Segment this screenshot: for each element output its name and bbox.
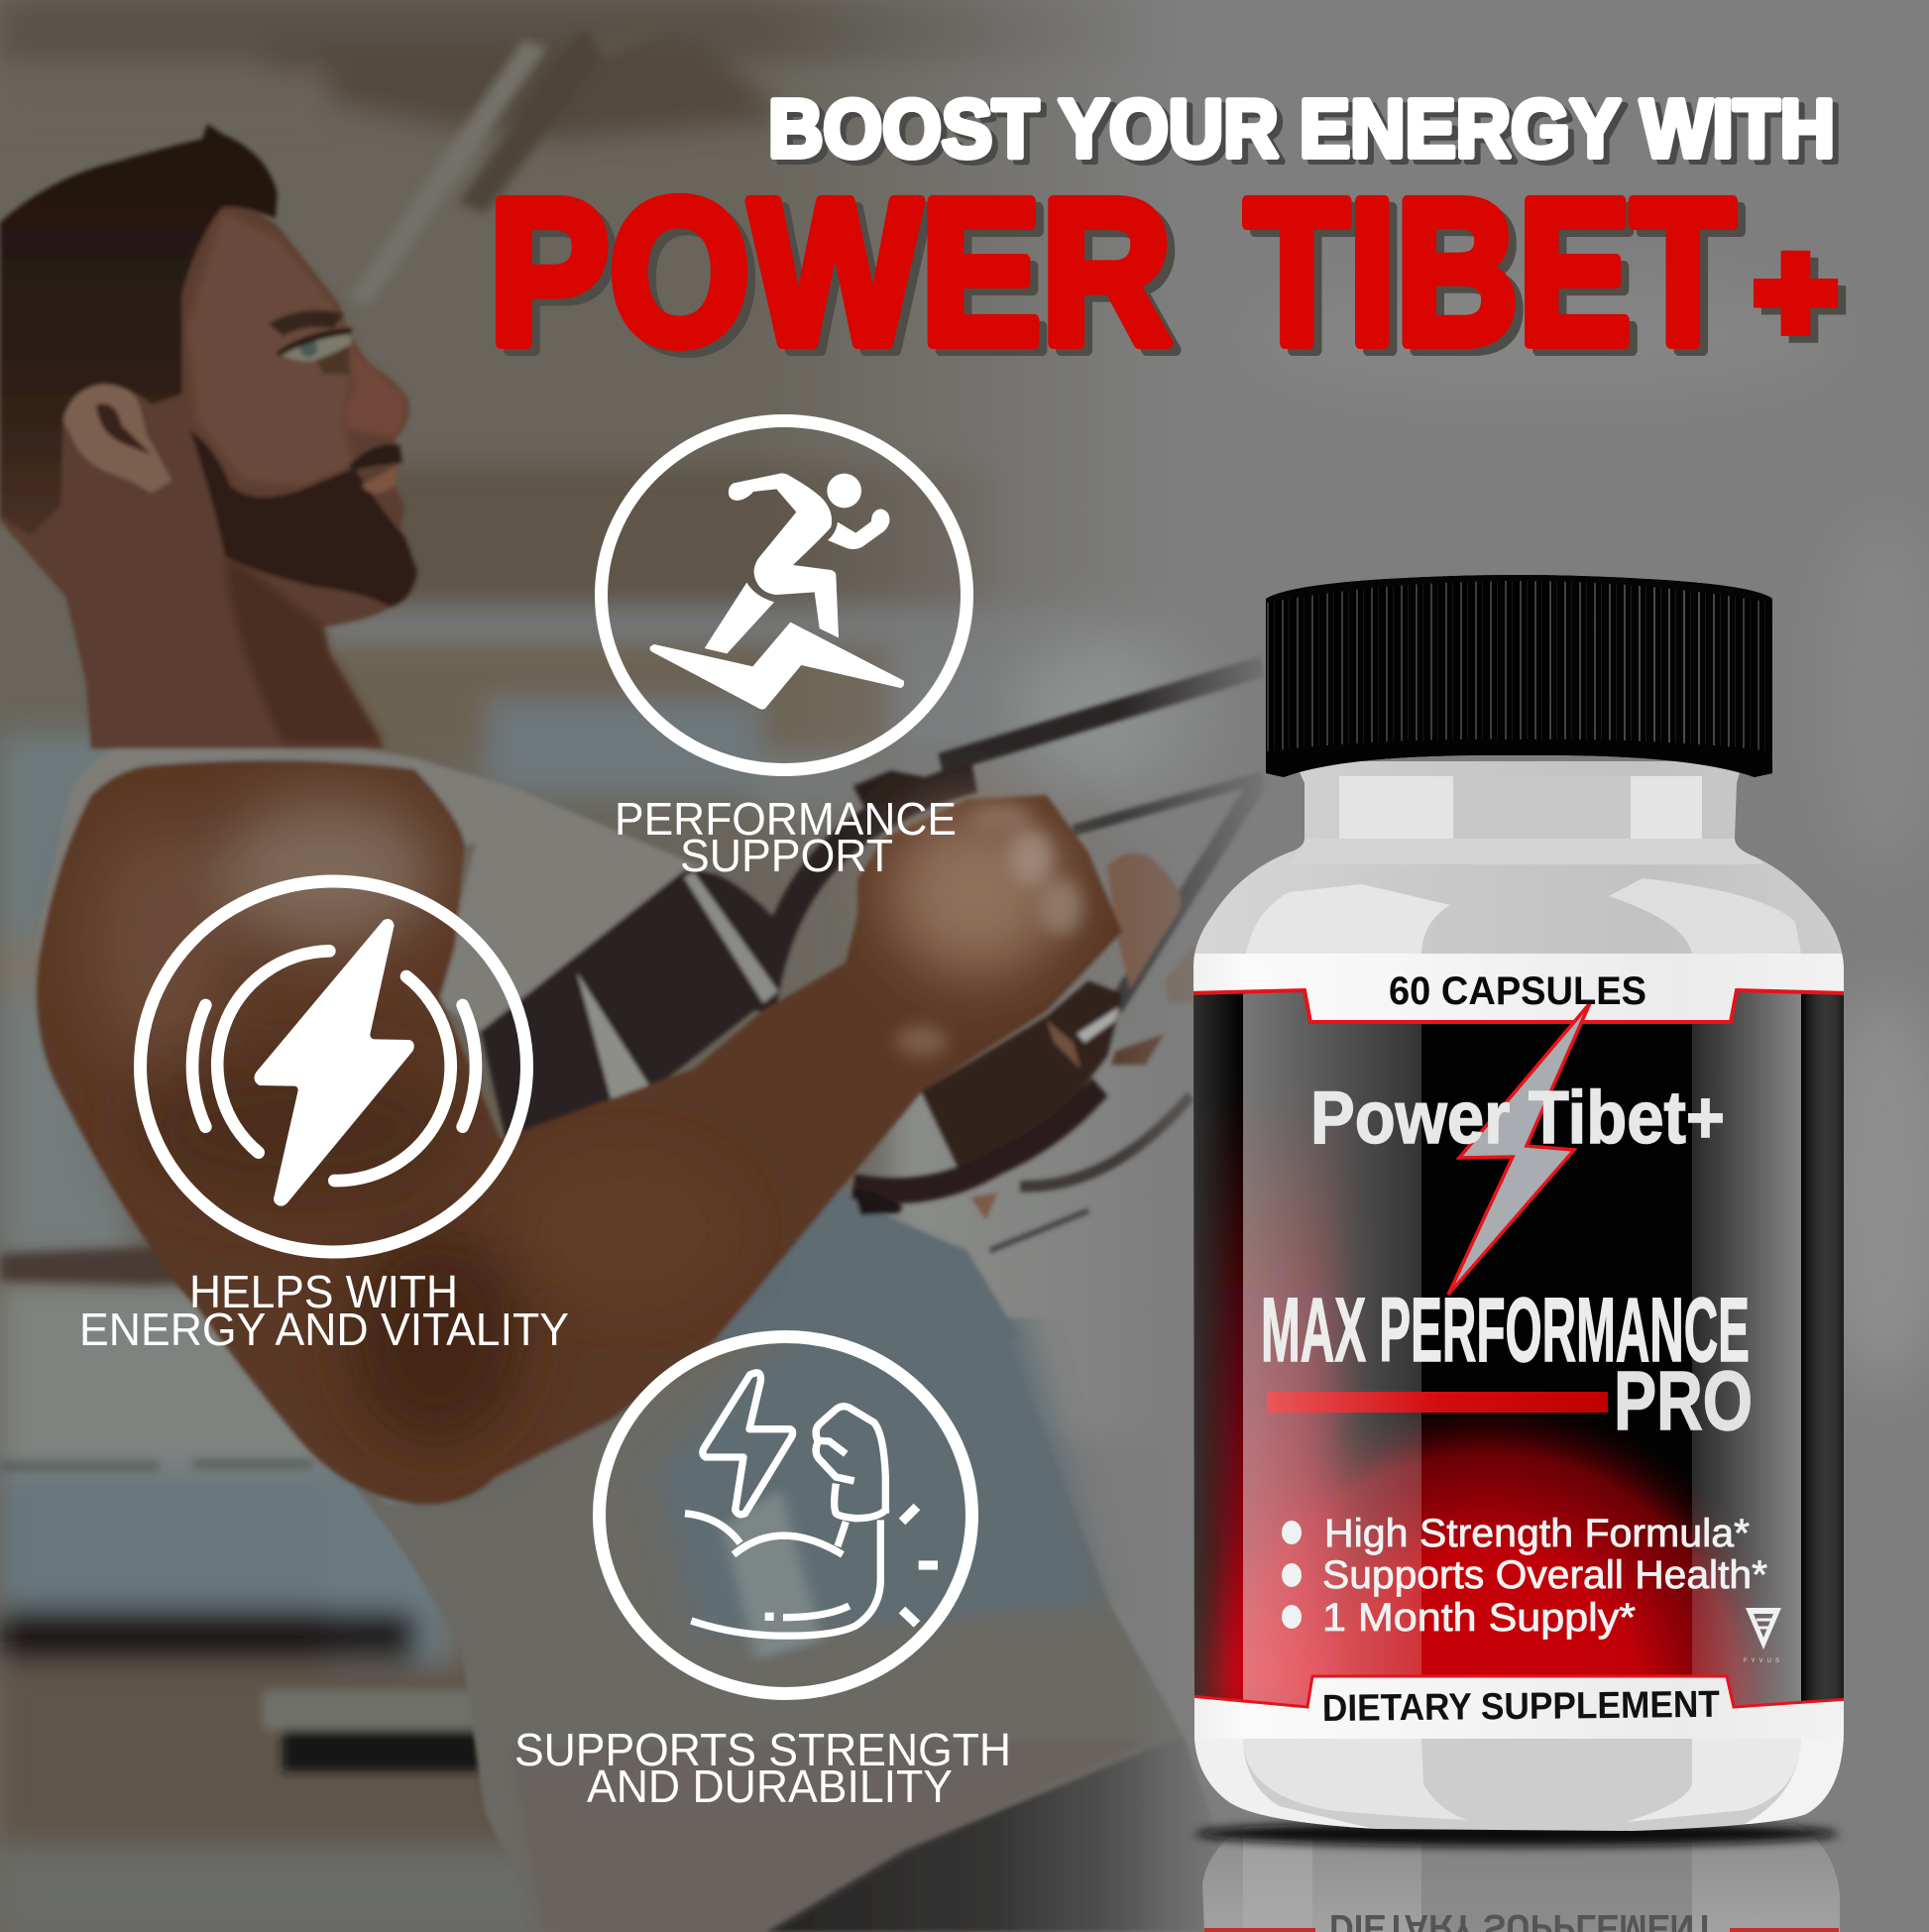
arm shading — [89, 798, 1066, 1447]
label: dietary supplement: DIETARY SUPPLEMENT — [1322, 1684, 1720, 1730]
label: bullet list: 1 Month Supply* — [1322, 1596, 1636, 1640]
arm and hand skin — [37, 760, 1122, 1505]
badge: energy and vitality — [79, 881, 569, 1355]
label: small maker logo: FYVUS — [1744, 1658, 1783, 1664]
lower shirt — [238, 1300, 1184, 1932]
background: grey fade on the right side — [753, 0, 1929, 1932]
tank top shoulder band — [35, 729, 714, 1041]
background: grey fade over the athlete — [1120, 595, 1418, 1932]
label: red bar — [1267, 1392, 1608, 1413]
label: pro: PRO — [1614, 1354, 1753, 1447]
title line: power tibet+: + — [1755, 213, 1837, 371]
background: soft light patches at right — [1011, 278, 1929, 1388]
caption — [514, 1724, 1011, 1812]
label: brand name: Power Tibet+ — [1310, 1076, 1725, 1159]
icon: lightning bolt with arcs — [192, 919, 476, 1206]
label: bullet list: Supports Overall Health* — [1322, 1553, 1767, 1597]
circle outline — [141, 881, 527, 1252]
caption: SUPPORT — [680, 830, 893, 881]
title line: power tibet+: TIBET — [1245, 158, 1735, 388]
product bottle — [1193, 575, 1844, 1831]
badge: strength and durability — [514, 1336, 1011, 1812]
caption: PERFORMANCE — [615, 793, 957, 845]
caption: SUPPORTS STRENGTH — [514, 1724, 1011, 1775]
caption: HELPS WITH — [189, 1266, 458, 1317]
caption — [615, 793, 957, 881]
bottle body plastic — [1190, 758, 1849, 1838]
straps and handles — [717, 666, 1263, 1338]
circle outline — [599, 1336, 971, 1693]
knuckle highlights — [896, 804, 1082, 1057]
title line: boost your energy with: BOOST YOUR ENERGY WITH — [768, 82, 1835, 174]
title line: power tibet+: POWER — [489, 158, 1172, 388]
photo: athlete pulling resistance straps — [0, 124, 1263, 1932]
black and red label — [1193, 988, 1844, 1709]
title line: power tibet+ — [489, 158, 1837, 388]
icon: flexed arm with bolt — [685, 1373, 938, 1636]
badge: performance support — [601, 420, 967, 881]
label: small maker logo — [1744, 1608, 1783, 1664]
label: 60 capsules: 60 CAPSULES — [1389, 969, 1646, 1013]
label lightning bolt — [1448, 1003, 1590, 1295]
icon: runner — [650, 473, 904, 710]
wrist wrap and lower handle — [853, 980, 1122, 1215]
label: bullet list: High Strength Formula* — [1324, 1512, 1750, 1555]
bottle contact shadow — [1194, 1821, 1839, 1847]
caption — [79, 1266, 569, 1355]
label: bullet list — [1282, 1512, 1767, 1640]
caption: AND DURABILITY — [587, 1761, 953, 1812]
head — [0, 124, 417, 748]
caption: ENERGY AND VITALITY — [79, 1304, 569, 1355]
shorts — [764, 1735, 1249, 1932]
armband — [481, 869, 778, 1139]
circle outline — [601, 420, 967, 769]
bottle reflection — [1202, 1824, 1840, 1932]
cap — [1266, 575, 1772, 777]
